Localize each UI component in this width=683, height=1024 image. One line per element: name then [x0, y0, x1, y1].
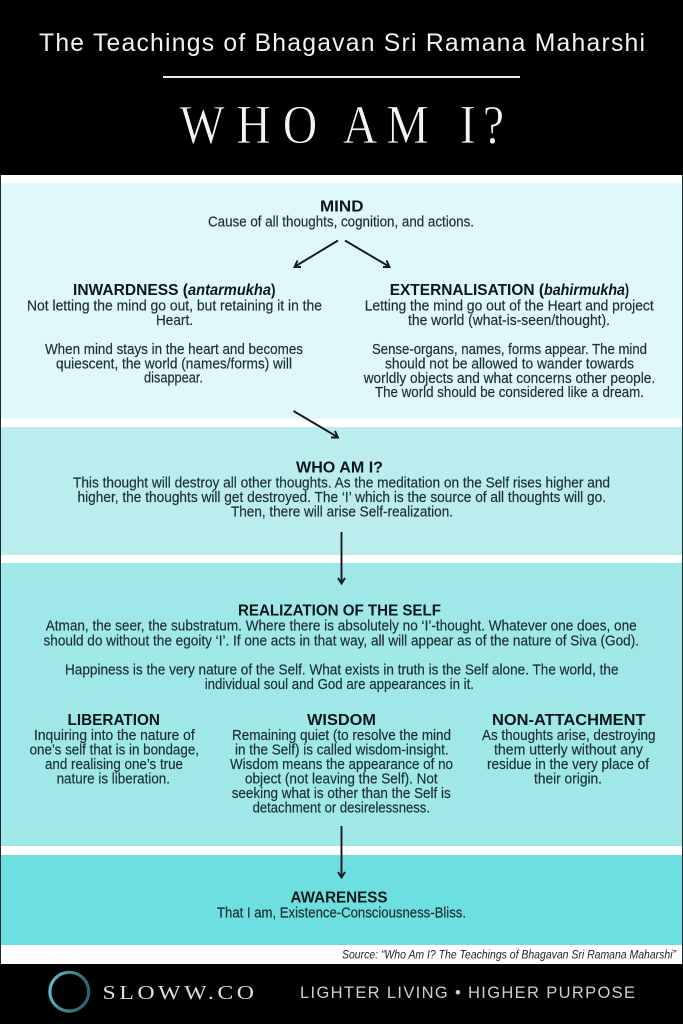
heading: externalisation — [390, 282, 629, 299]
heading: awareness: AWARENESS — [290, 889, 388, 906]
arrow: realization to awareness — [338, 826, 345, 878]
column: wisdom: detachment or desirelessness. — [253, 801, 430, 817]
heading: liberation: LIBERATION — [68, 712, 160, 729]
column: liberation: one’s self that is in bondage, — [30, 742, 199, 758]
heading: non-attachment: NON-ATTACHMENT — [492, 712, 646, 729]
text: realization description — [44, 619, 639, 693]
text: who am i description: This thought will destroy all other thoughts. As the meditation on the Self rises higher and — [73, 476, 610, 492]
footer band — [0, 964, 683, 1024]
heading: inwardness: INWARDNESS ( — [73, 282, 189, 299]
text: who am i description: higher, the thoughts will get destroyed. The ‘I’ which is the source of all thoughts will go. — [78, 490, 606, 506]
brand name: SLOWW.CO — [102, 982, 258, 1004]
column: non-attachment: residue in the very place of — [487, 757, 650, 773]
tagline: LIGHTER LIVING • HIGHER PURPOSE — [300, 984, 635, 1002]
column: wisdom: object (not leaving the Self). Not — [245, 771, 438, 787]
text: realization description: individual soul and God are appearances in it. — [205, 677, 474, 693]
main title: WHO AM I? — [180, 95, 504, 156]
heading: wisdom: WISDOM — [307, 712, 376, 729]
column: inwardness: disappear. — [144, 371, 203, 387]
column: externalisation: should not be allowed to wander towards — [385, 356, 634, 372]
arrow: to externalisation — [345, 240, 390, 267]
panel: mind — [1, 183, 682, 418]
heading: realization: REALIZATION OF THE SELF — [238, 603, 441, 620]
column: non-attachment: their origin. — [534, 771, 602, 787]
column: wisdom: seeking what is other than the Self is — [232, 786, 451, 802]
heading: externalisation: ) — [625, 282, 629, 299]
heading: inwardness — [73, 282, 276, 299]
panel: realization of the self — [1, 563, 682, 846]
header band — [0, 0, 683, 175]
column: externalisation: the world (what-is-seen/thought). — [408, 313, 610, 329]
panel: who am i — [1, 427, 682, 555]
column: non-attachment: them utterly without any — [494, 742, 644, 758]
column: liberation — [30, 712, 199, 787]
heading: who am i: WHO AM I? — [296, 460, 383, 477]
icon: ring logo — [50, 972, 89, 1011]
arrow: externalisation to who am i — [294, 411, 338, 438]
column: externalisation: worldly objects and what concerns other people. — [363, 371, 655, 387]
text: realization description: should do without the egoity ‘I’. If one acts in that way, all will appear as of the nature of Siva (God). — [44, 634, 639, 650]
column: externalisation: Letting the mind go out of the Heart and project — [365, 298, 654, 314]
text: mind description: Cause of all thoughts, cognition, and actions. — [208, 214, 474, 230]
column: inwardness — [27, 282, 322, 387]
arrow: to inwardness — [294, 240, 338, 267]
column: inwardness: quiescent, the world (names/forms) will — [56, 356, 292, 372]
subtitle: The Teachings of Bhagavan Sri Ramana Maharshi — [39, 30, 645, 57]
text: who am i description — [73, 476, 610, 521]
column: liberation: Inquiring into the nature of — [34, 728, 196, 744]
column: externalisation — [363, 282, 655, 401]
column: liberation: nature is liberation. — [57, 771, 170, 787]
column: inwardness: Heart. — [156, 313, 193, 329]
arrow: who am i to realization — [338, 532, 345, 584]
column: liberation: and realising one’s true — [45, 757, 183, 773]
column: non-attachment — [482, 712, 656, 787]
heading: mind: MIND — [320, 198, 364, 216]
heading: inwardness: ) — [271, 282, 276, 299]
column: wisdom — [230, 712, 453, 817]
text: who am i description: Then, there will arise Self-realization. — [231, 505, 453, 521]
heading: externalisation: EXTERNALISATION ( — [390, 282, 545, 299]
column: non-attachment: As thoughts arise, destroying — [482, 728, 656, 744]
column: inwardness: Not letting the mind go out, but retaining it in the — [27, 298, 322, 314]
column: inwardness: When mind stays in the heart and becomes — [45, 342, 303, 358]
text: realization description: Happiness is the very nature of the Self. What exists in truth is the Self alone. The world, the — [65, 662, 618, 678]
column: externalisation: Sense-organs, names, forms appear. The mind — [372, 342, 647, 358]
heading: externalisation: bahirmukha — [544, 282, 625, 299]
text: awareness description: That I am, Existence-Consciousness-Bliss. — [217, 906, 466, 922]
heading: inwardness: antarmukha — [188, 282, 271, 299]
column: externalisation: The world should be considered like a dream. — [375, 385, 644, 401]
column: wisdom: in the Self) is called wisdom-insight. — [235, 742, 449, 758]
column: wisdom: Wisdom means the appearance of no — [230, 757, 453, 773]
panel: awareness — [1, 855, 682, 945]
column: wisdom: Remaining quiet (to resolve the mind — [232, 728, 451, 744]
text: realization description: Atman, the seer, the substratum. Where there is absolutely no ‘I’-thought. Whatever one does, one — [46, 619, 637, 635]
